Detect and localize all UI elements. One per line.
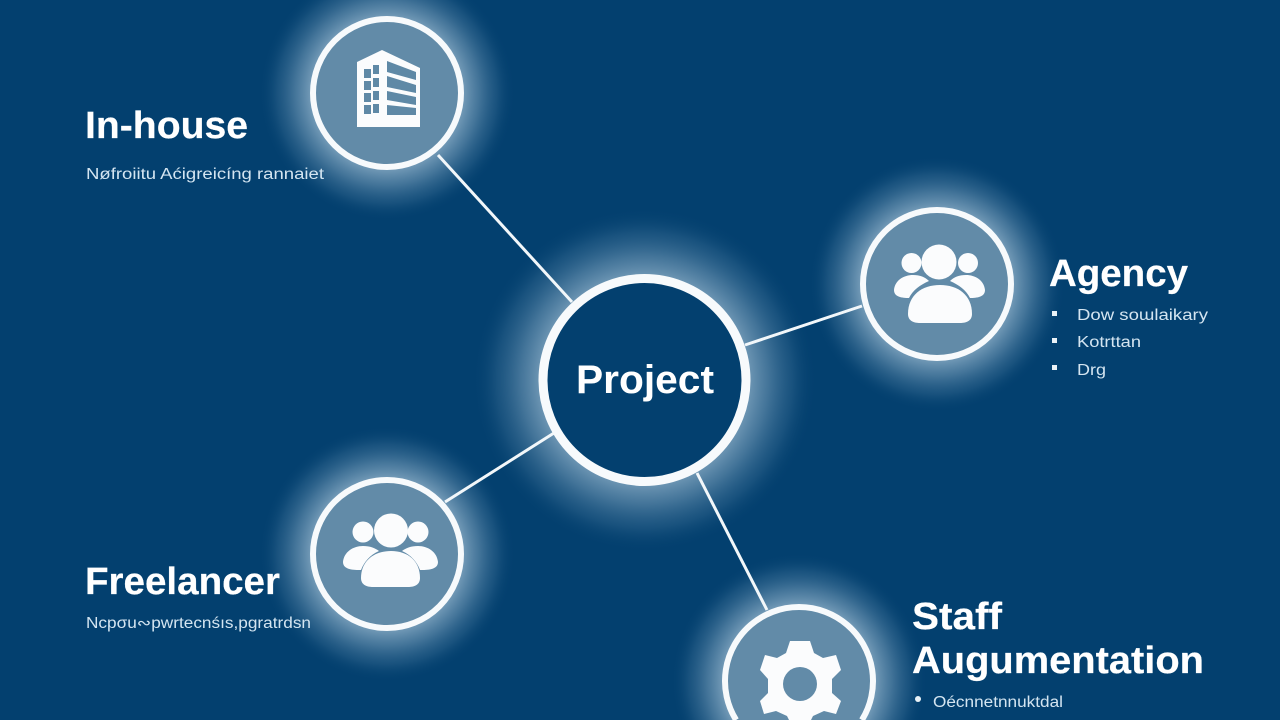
label: project: Project	[576, 358, 714, 402]
connector: staff augmentation to project	[697, 473, 767, 610]
list: agency: Kotrttan	[1077, 334, 1141, 351]
list: agency: Drg	[1077, 362, 1106, 379]
glow: in-house	[259, 0, 515, 221]
node: project	[543, 278, 746, 482]
description: in-house: Nøfroiitu Aćigreicíng rannaiet	[86, 166, 325, 183]
icon: team	[894, 244, 985, 323]
list: agency: Dow soɯlaikary	[1077, 307, 1208, 324]
glow: project	[472, 208, 816, 552]
heading: staff augmentation: Staff	[912, 596, 1002, 638]
node: staff augmentation	[725, 607, 873, 720]
connector: freelancer to project	[445, 433, 554, 502]
node: freelancer	[313, 480, 461, 628]
block: in-house	[85, 105, 325, 183]
icon: building	[357, 50, 420, 127]
heading: agency: Agency	[1049, 253, 1188, 295]
glow: agency	[809, 156, 1065, 412]
block: freelancer	[85, 561, 311, 632]
connector: agency to project	[745, 306, 862, 345]
node: agency	[863, 210, 1011, 358]
node: in-house	[313, 19, 461, 167]
glow: staff augmentation	[671, 553, 927, 720]
icon: gear	[760, 641, 841, 720]
glow: freelancer	[259, 426, 515, 682]
block: staff augmentation: Augumentation	[912, 640, 1204, 682]
connector: in-house to project	[438, 155, 572, 302]
description: freelancer: Ncpσu∾pwrtecnśıs,pgratrdsn	[86, 615, 311, 632]
list: agency	[1052, 307, 1208, 379]
icon: team	[343, 514, 438, 587]
block: agency	[1049, 253, 1208, 379]
heading: freelancer: Freelancer	[85, 561, 280, 603]
list: staff augmentation: Oécnnetnnuktdal	[933, 694, 1063, 711]
block: staff augmentation	[912, 596, 1204, 711]
heading: in-house: In-house	[85, 105, 248, 147]
